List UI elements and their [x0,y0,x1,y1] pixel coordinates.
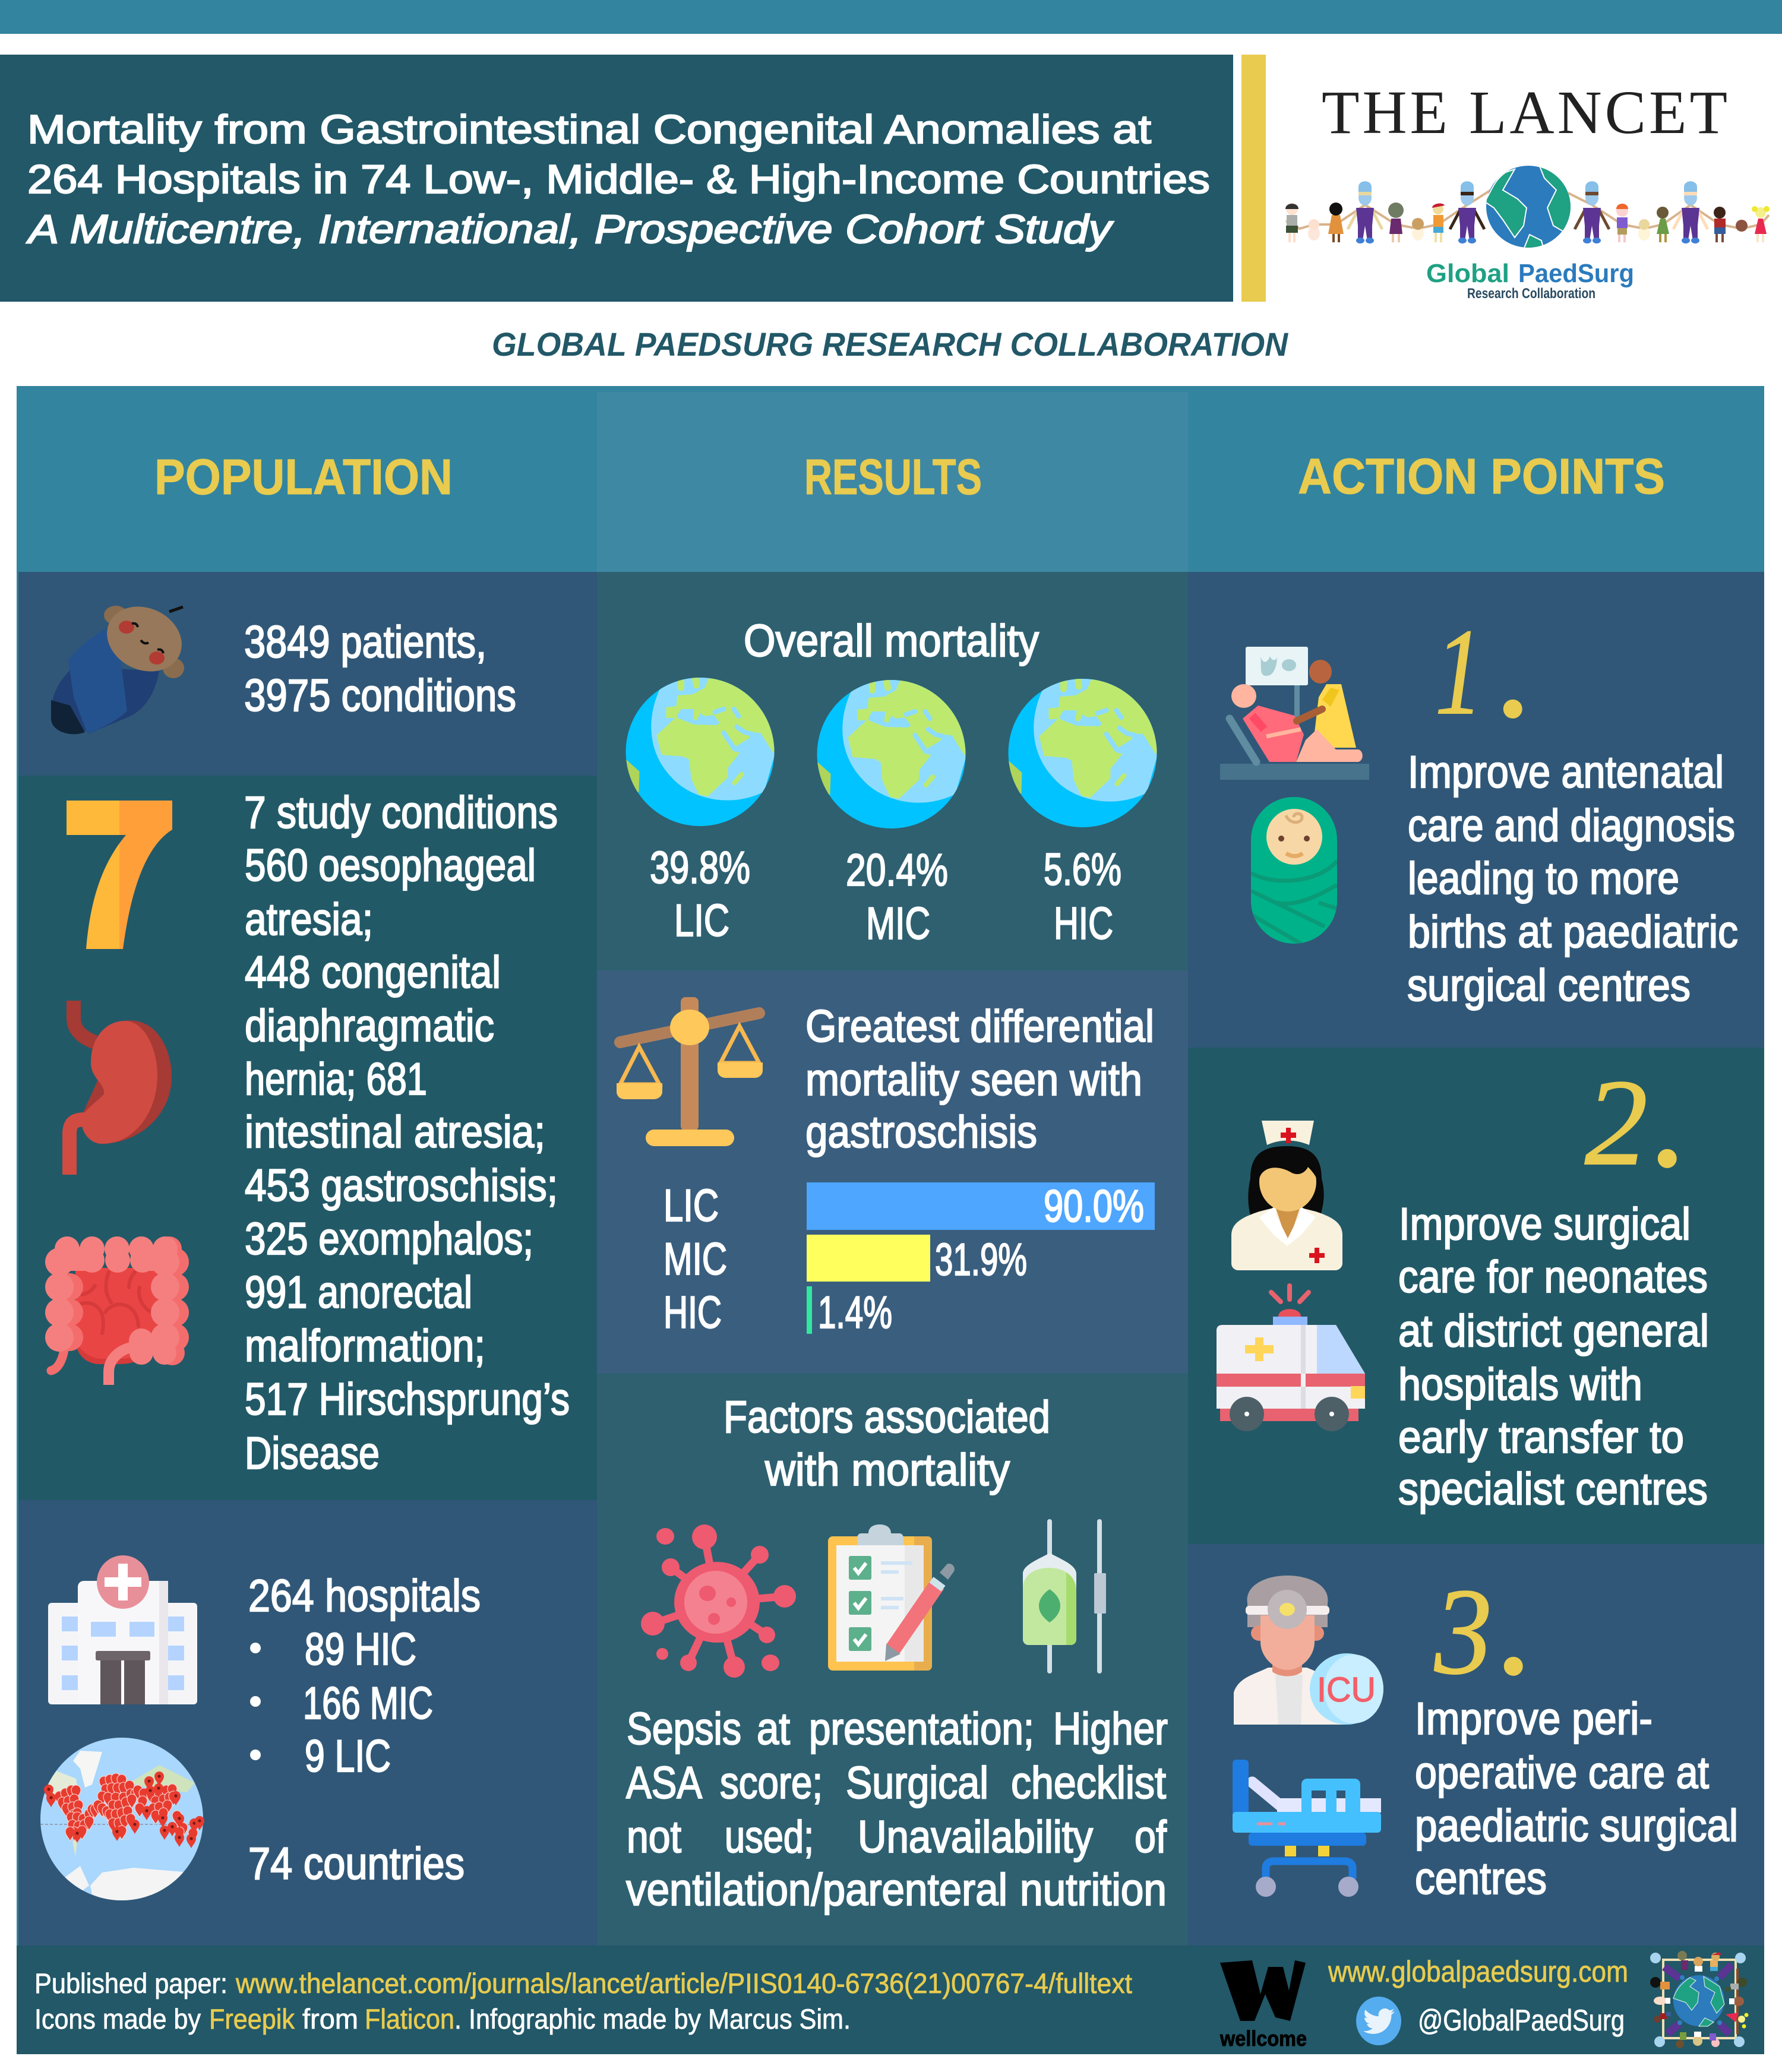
bar: MIC 31.9%: MIC [663,1234,727,1285]
stat: MIC mortality: MIC [866,899,930,949]
title line 2: 264 Hospitals in 74 Low-, Middle- & High-Income Countries [27,157,1210,202]
text: associated factors: used; [725,1812,814,1862]
heading: greatest differential: Greatest differential [805,1001,1154,1052]
text: associated factors: presentation; [809,1704,1034,1754]
Global PaedSurg wordmark: Research Collaboration [1467,286,1595,302]
heading: population: POPULATION [154,449,453,505]
text: action 3: Improve peri- [1415,1694,1653,1744]
subtitle: GLOBAL PAEDSURG RESEARCH COLLABORATION [492,325,1288,363]
text: associated factors: nutrition [1020,1865,1167,1915]
credits line: Icons made by [34,2003,201,2035]
text: hospitals by income group: 166 MIC [303,1678,433,1729]
stat: LIC mortality: 39.8% [650,843,750,893]
logo: wellcome: wellcome [1219,2026,1307,2051]
hospital pins: clusters [55,1773,198,1842]
website link: www.globalpaedsurg.com [1328,1955,1628,1988]
logo: children and surgeons around a globe [1285,163,1770,252]
bar: HIC 1.4%: HIC [663,1288,722,1338]
text: action 2: specialist centres [1398,1464,1708,1514]
panel: action point 1 [1188,572,1764,1048]
published paper line: www.thelancet.com/journals/lancet/article/PIIS0140-6736(21)00767-4/fulltext [235,1967,1132,1999]
icon: swaddled baby [51,594,192,734]
heading: greatest differential: mortality seen with [805,1055,1142,1105]
stat: HIC mortality: 5.6% [1044,844,1121,895]
The Lancet wordmark: THE LANCET [1322,78,1727,147]
text: action 2: care for neonates [1398,1252,1708,1302]
icon: stomach [69,1001,172,1175]
logo block [1285,78,1770,302]
stat: LIC mortality: LIC [674,896,729,946]
stat: HIC mortality: HIC [1054,899,1113,949]
text: associated factors: ASA [626,1758,702,1808]
text: action 2: hospitals with [1398,1359,1642,1410]
text: seven study conditions: 325 exomphalos; [245,1214,533,1264]
panel: greatest differential mortality [597,970,1188,1374]
top band [0,0,1782,34]
icon: wrapped newborn [1251,797,1337,944]
heading: greatest differential [805,1001,1154,1157]
yellow accent bar [1241,55,1266,302]
text: seven study conditions: 448 congenital [245,947,501,998]
main panel header band [17,386,1764,572]
text: action 3: paediatric surgical [1415,1801,1738,1851]
text: seven study conditions: diaphragmatic [245,1001,494,1051]
icon: nurse [1231,1121,1342,1270]
icon: ambulance [1217,1286,1365,1431]
text: hospitals by income group: 264 hospitals [248,1571,481,1621]
heading: factors: with mortality [764,1445,1010,1495]
credits line: Freepik [209,2003,295,2035]
icon: world map with hospital pins [40,1738,205,1906]
icon: antenatal ultrasound [1220,647,1369,780]
text: associated factors: Unavailability [858,1812,1093,1862]
icon: globes [623,670,1158,828]
bar: MIC 31.9% [663,1234,1027,1285]
text: associated factors: not [627,1812,681,1862]
numeral 2: 2 [1585,1054,1648,1191]
logo: children ring around globe [1650,1951,1749,2048]
numeral 1: 1 [1435,603,1483,740]
bar: LIC 90.0%: LIC [663,1181,719,1231]
text: seven study conditions: 453 gastroschisis; [245,1160,558,1211]
text: seven study conditions: malformation; [245,1321,485,1371]
panel: overall mortality [597,572,1188,970]
numeral 1 dot: . [1493,574,1533,751]
numeral 3 dot: . [1493,1531,1534,1709]
text: action 3 [1415,1694,1738,1904]
heading: action points: ACTION POINTS [1298,448,1665,504]
hospital pins: isolated [44,1772,204,1848]
panel: factors associated with mortality [597,1374,1188,1946]
heading: greatest differential: gastroschisis [805,1107,1037,1157]
stat: LIC mortality [650,843,750,946]
title banner [0,55,1233,302]
icon: ICU doctor: ICU [1317,1671,1376,1709]
text: hospitals by income group: 89 HIC [305,1624,416,1675]
text: associated factors: score; [720,1758,823,1808]
icon: hospital [48,1555,197,1704]
panel: action point 2 [1188,1023,1764,1544]
text: seven study conditions: 7 study conditions [244,787,558,838]
children [1285,203,1770,242]
text: action 1: births at paediatric [1408,907,1738,957]
left edge line [17,572,18,1946]
text: associated factors: Sepsis [627,1704,741,1754]
text: seven study conditions: 991 anorectal [245,1267,472,1318]
panel: study conditions [18,776,597,1500]
icon: intestines [45,1236,189,1385]
text: seven study conditions: 517 Hirschsprung’s [245,1374,570,1425]
bar: MIC 31.9%: 31.9% [935,1235,1027,1285]
stat: HIC mortality [1044,844,1121,949]
icon: hospital bed [1233,1760,1381,1897]
text: associated factors: ventilation/parenteral [626,1865,1007,1915]
text: associated factors: Surgical [846,1758,988,1808]
numeral 2 dot: . [1647,1023,1687,1201]
icon: twitter [1356,1997,1401,2045]
text: action 2: Improve surgical [1399,1199,1691,1249]
bar: LIC 90.0% [663,1181,1155,1232]
Global PaedSurg wordmark: Global [1426,259,1509,288]
bar: LIC 90.0%: 90.0% [1044,1181,1144,1232]
title line 1: Mortality from Gastrointestinal Congenital Anomalies at [27,107,1151,152]
icon: balance scales [617,997,763,1146]
text: hospitals by income group: 74 countries [248,1839,465,1889]
published paper line: Published paper: [34,1967,228,1999]
icon: surgical checklist [828,1524,955,1671]
icon: parenteral nutrition bag [1023,1519,1106,1674]
icon: ICU doctor [1234,1576,1383,1725]
text: action 1: care and diagnosis [1408,801,1735,851]
Global PaedSurg wordmark [1426,259,1634,302]
panel: patients [18,572,597,776]
bar: HIC 1.4%: 1.4% [818,1288,892,1338]
credits line: from [302,2003,358,2035]
text: associated factors: checklist [1011,1758,1166,1808]
text: hospitals by income group [248,1571,481,1889]
twitter handle: @GlobalPaedSurg [1418,2004,1625,2037]
text: action 1: leading to more [1408,853,1679,904]
text: patient counts: 3849 patients, [244,617,486,668]
text: associated factors: of [1135,1812,1167,1862]
bar: HIC 1.4% [663,1286,892,1338]
text: action 1 [1407,747,1738,1011]
text: seven study conditions [244,787,570,1479]
text: seven study conditions: hernia; 681 [245,1054,427,1105]
text: action 2: at district general [1398,1306,1709,1356]
text: action 3: operative care at [1415,1748,1709,1798]
text: action 1: surgical centres [1407,960,1691,1011]
credits line [34,2003,851,2035]
text: seven study conditions: 560 oesophageal [245,840,536,891]
text: action 2: early transfer to [1398,1412,1684,1463]
heading: results: RESULTS [804,449,982,505]
title line 3: A Multicentre, International, Prospective Cohort Study [26,207,1114,252]
text: associated factors [626,1704,1168,1915]
text: seven study conditions: atresia; [245,894,373,945]
numeral 3: 3 [1434,1563,1492,1700]
text: patient counts [244,617,516,721]
text: associated factors: Higher [1053,1704,1168,1754]
logo: wellcome [1219,1960,1307,2051]
icon: virus [641,1524,796,1678]
text: patient counts: 3975 conditions [244,670,516,721]
text: action 1: Improve antenatal [1408,747,1724,798]
heading: factors: Factors associated [723,1392,1050,1443]
icon: number seven [67,801,172,949]
bar chart: gastroschisis mortality [663,1181,1155,1338]
text: hospitals by income group: 9 LIC [305,1731,391,1782]
panel: hospitals and countries [18,1500,597,1946]
stat: MIC mortality: 20.4% [846,845,948,896]
text: action 3: centres [1415,1853,1547,1904]
footer [17,1946,1764,2054]
panel: action point 3 [1188,1531,1764,1946]
surgeons [1348,181,1708,243]
credits line: Flaticon [365,2003,454,2035]
heading: factors [723,1392,1050,1495]
text: action 2 [1398,1199,1709,1514]
text: seven study conditions: intestinal atresia; [245,1107,545,1157]
credits line: . Infographic made by Marcus Sim. [454,2003,851,2035]
heading: overall mortality: Overall mortality [744,616,1039,666]
text: seven study conditions: Disease [245,1428,380,1479]
stat: MIC mortality [846,845,948,949]
Global PaedSurg wordmark: PaedSurg [1518,259,1634,288]
text: associated factors: at [757,1704,790,1754]
